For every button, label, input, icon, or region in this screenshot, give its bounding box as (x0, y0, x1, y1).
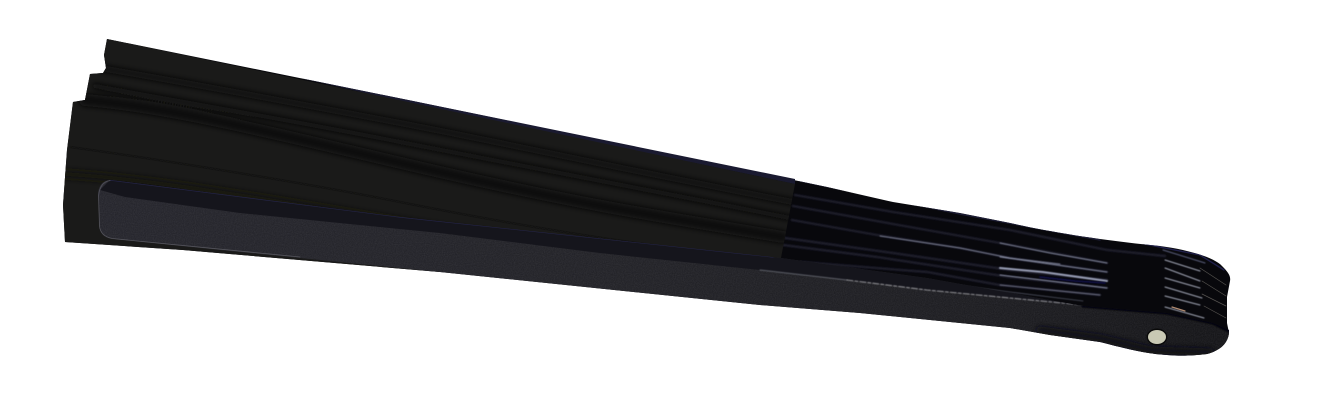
dark upper band of the guard (100, 180, 1083, 306)
guard highlight lines (98, 180, 1229, 352)
dark fan silhouette with ribbed sticks (55, 30, 1240, 365)
pleated fabric panel (55, 30, 805, 275)
head highlights (1163, 250, 1205, 318)
illustration: closed black folding fan (63, 39, 1230, 356)
fan body (55, 30, 1240, 365)
outer stick edge along the top (300, 78, 795, 184)
front guard stick (90, 175, 1235, 360)
stick ribs (783, 181, 1226, 318)
rivet pin (1146, 328, 1168, 346)
